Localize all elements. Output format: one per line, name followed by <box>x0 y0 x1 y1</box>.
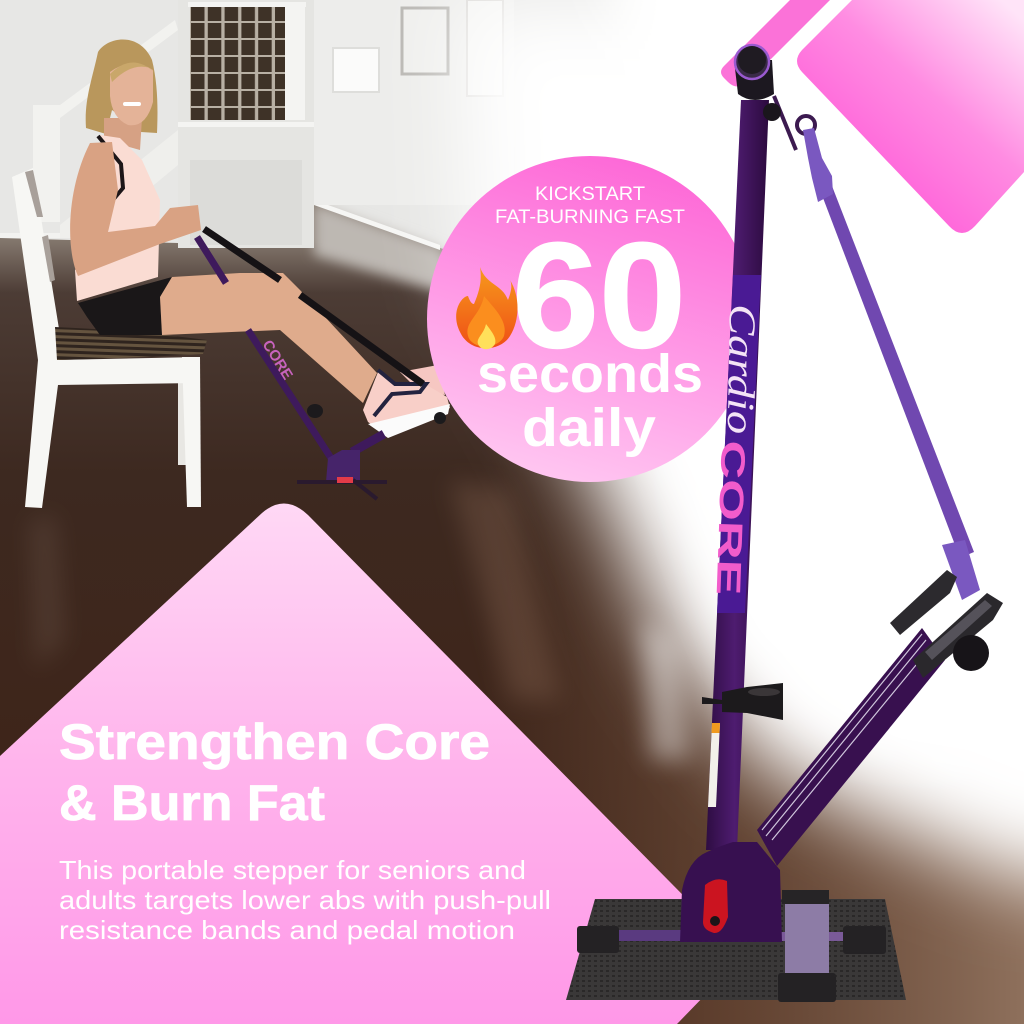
face and neck <box>104 62 154 150</box>
seated woman using the stepper <box>12 39 450 508</box>
handle clip <box>702 683 783 720</box>
resistance band <box>204 229 423 384</box>
description: adults targets lower abs with push-pull <box>59 885 551 915</box>
tank top <box>75 135 160 301</box>
callout subtitle: FAT-BURNING FAST <box>495 207 685 228</box>
description: resistance bands and pedal motion <box>59 915 515 945</box>
callout subtitle <box>495 184 685 228</box>
hair <box>86 39 157 134</box>
shorts <box>78 277 172 335</box>
arm <box>70 142 201 276</box>
shaft logo: CORE <box>709 440 752 596</box>
pedals <box>890 570 1003 678</box>
heading: Strengthen Core <box>59 714 490 770</box>
legs <box>160 273 377 403</box>
top straps <box>98 136 123 201</box>
number 60: 60 <box>512 211 686 379</box>
heading <box>59 714 490 831</box>
decorative pink diamond shapes top right <box>721 0 1024 233</box>
main shaft <box>706 100 769 850</box>
top knob <box>734 45 781 121</box>
stepper pole in photo: CORE <box>259 337 296 383</box>
base rails <box>577 890 886 1002</box>
seconds daily: seconds <box>477 344 703 404</box>
stepper machine <box>566 45 1003 1002</box>
callout subtitle: KICKSTART <box>535 184 645 205</box>
shoe <box>363 365 450 438</box>
shaft label band <box>717 275 761 613</box>
base housing <box>680 842 782 942</box>
rounded diamond panel with main text <box>0 503 743 1024</box>
icon: flame <box>456 267 518 349</box>
warning label <box>708 723 720 807</box>
red lever <box>703 879 728 933</box>
seconds daily <box>477 344 703 458</box>
floor mat <box>566 899 906 1000</box>
description <box>59 855 551 945</box>
shaft logo: Cardio <box>719 304 763 435</box>
description: This portable stepper for seniors and <box>59 855 526 885</box>
heading: & Burn Fat <box>59 775 325 831</box>
stepper pole in photo <box>197 237 387 499</box>
arm <box>757 628 945 866</box>
shaft logo <box>709 304 763 596</box>
seconds daily: daily <box>522 398 656 458</box>
resistance band strap <box>774 96 980 600</box>
chair <box>12 168 207 508</box>
callout circle <box>427 156 753 482</box>
